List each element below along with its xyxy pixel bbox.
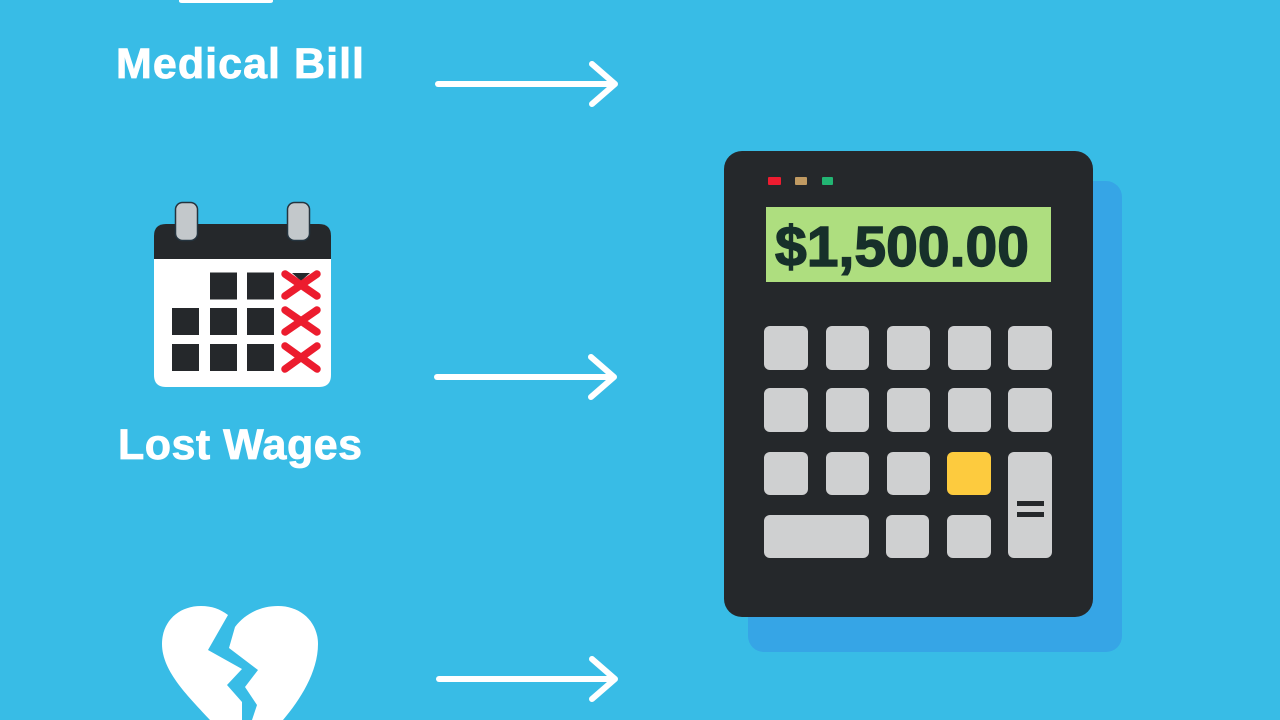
heading: Lost Wages: Lost Wages bbox=[118, 421, 362, 469]
calculator keys bbox=[764, 326, 1052, 558]
icon: broken heart bbox=[162, 606, 318, 720]
calculator shadow bbox=[748, 181, 1122, 652]
calendar rings bbox=[176, 202, 310, 240]
calculator body bbox=[724, 151, 1093, 617]
calendar day squares bbox=[172, 272, 310, 371]
calculator amount: $1,500.00 bbox=[775, 215, 1029, 279]
yellow key bbox=[947, 452, 991, 495]
arrow: pain and suffering to calculator bbox=[439, 659, 615, 699]
indicator lights bbox=[768, 177, 833, 185]
equals sign bbox=[1017, 501, 1044, 517]
icon: calendar bbox=[154, 202, 331, 387]
red crosses bbox=[285, 274, 317, 369]
calculator bbox=[724, 151, 1093, 617]
arrow: lost wages to calculator bbox=[437, 357, 614, 397]
icon: medical bill (cropped) bbox=[179, 0, 273, 3]
heading: Medical Bill: Medical Bill bbox=[116, 40, 364, 88]
calculator screen bbox=[766, 207, 1051, 282]
arrow: medical bill to calculator bbox=[438, 64, 615, 104]
